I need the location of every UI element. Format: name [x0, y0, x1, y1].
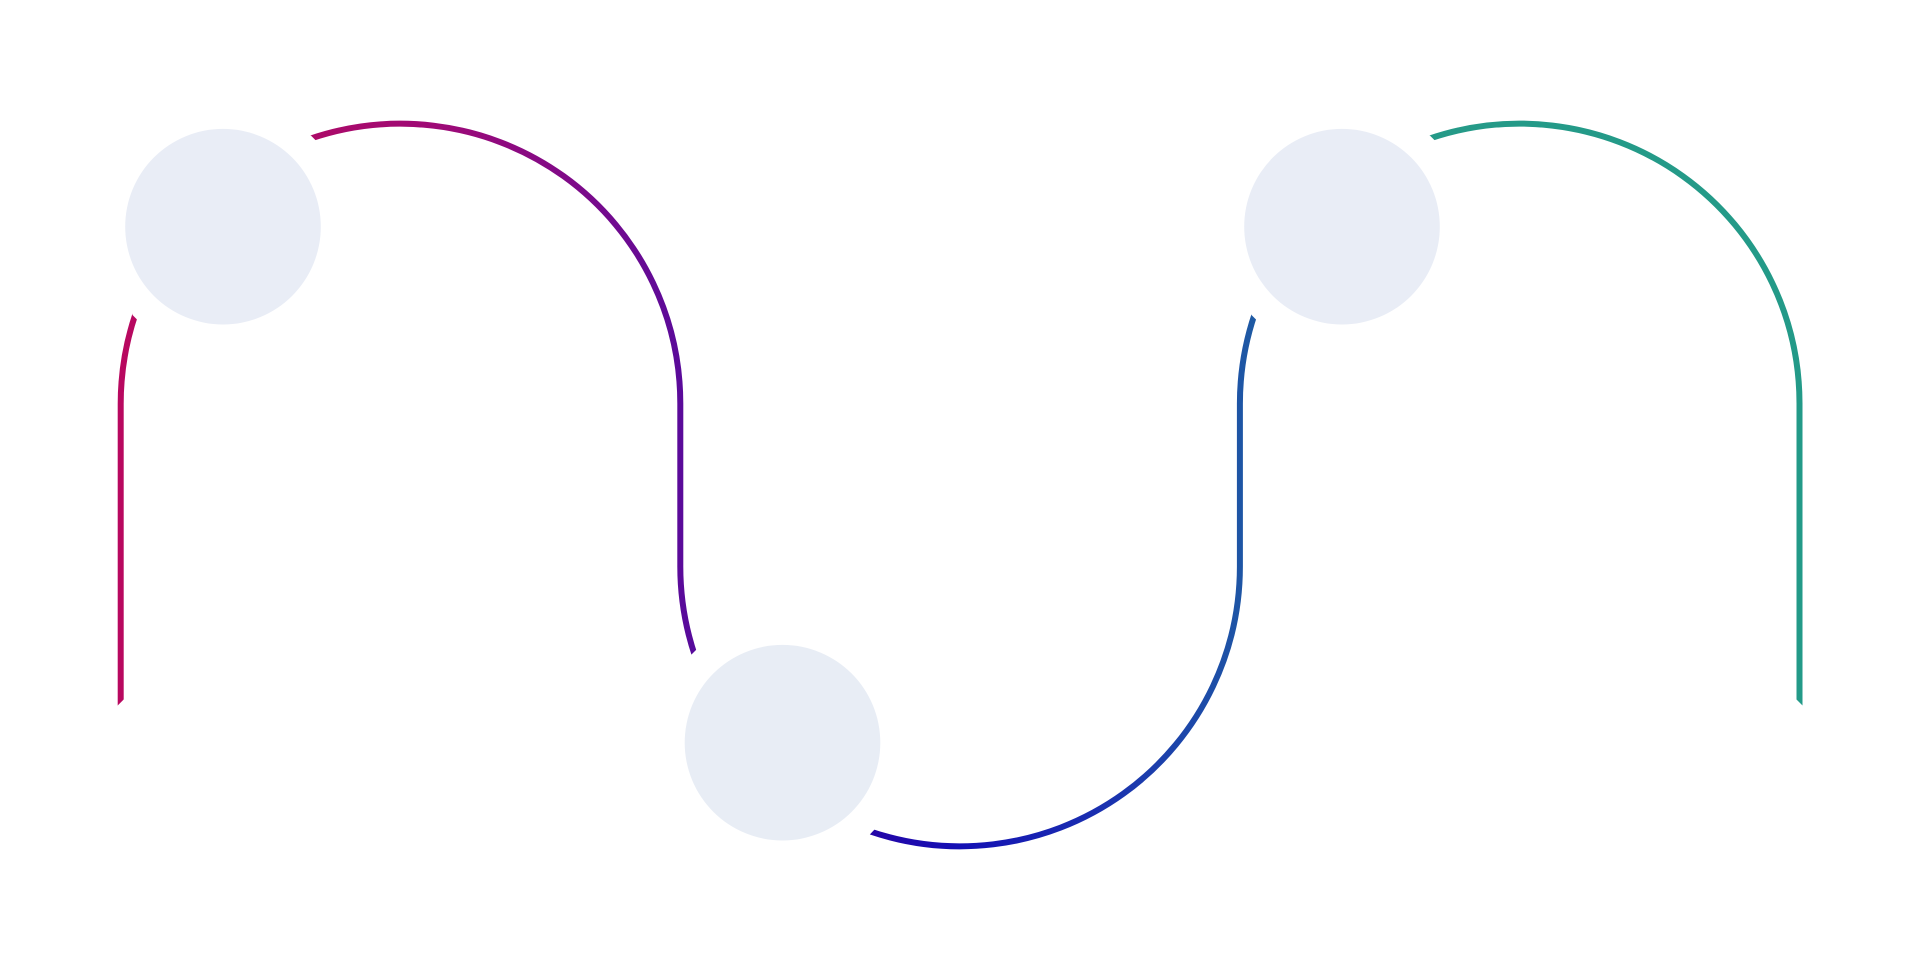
connector line: first arch down to second circle — [310, 124, 695, 656]
connector line: bottom bowl up to third circle — [870, 314, 1255, 846]
circle: first step — [125, 129, 321, 324]
connector line: last arch on the right — [1429, 124, 1800, 707]
circle: third step — [1244, 129, 1440, 324]
line end cuts — [116, 135, 1804, 834]
connector line: left vertical into first circle — [121, 314, 135, 707]
circle: second step — [685, 645, 880, 840]
